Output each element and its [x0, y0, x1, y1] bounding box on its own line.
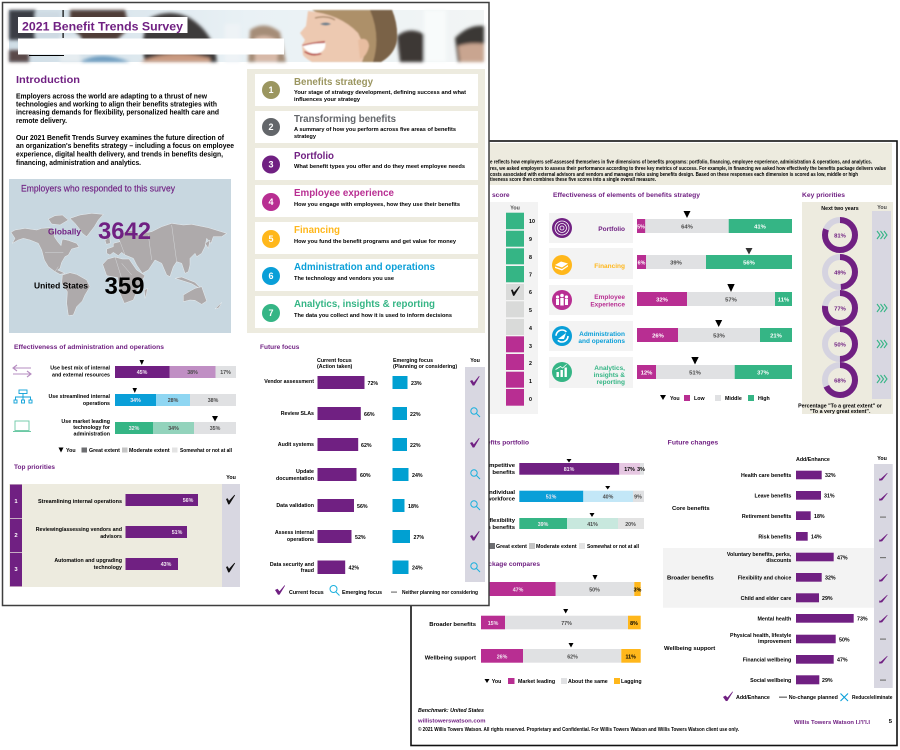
chart: benefits portfolio bars: flexibility: [489, 518, 516, 524]
page 2: benefits strategy detail: [411, 141, 897, 746]
chart: administration bars: Use market leading: [61, 419, 110, 425]
donut 68%: 68%: [834, 378, 847, 384]
row: update documentation: [276, 468, 423, 482]
row: update documentation: documentation: [276, 476, 314, 482]
panel: top priorities: 1: [14, 499, 18, 505]
item 5: [255, 222, 478, 254]
panel: key priorities donuts: Next two years: [821, 206, 859, 212]
chart: benefits portfolio bars: 9%: [634, 495, 642, 501]
item 2: strategy: [294, 134, 316, 140]
row: audit systems: 22%: [410, 443, 421, 449]
item 4: How you engage with employees, how they use their benefits: [294, 202, 460, 208]
row: audit systems: Audit systems: [278, 442, 314, 448]
heading: key priorities: Key priorities: [802, 192, 845, 199]
title: 2021 Benefit Trends Survey: [22, 20, 183, 34]
panel: key priorities donuts: Percentage "To a great extent" or: [798, 404, 882, 410]
legend: administration: [58, 448, 232, 454]
item 2: [255, 111, 478, 143]
row: analytics: reporting: [596, 379, 625, 386]
panel: score scale: 2: [529, 361, 532, 367]
panel: top priorities: advisors: [100, 534, 122, 540]
row: employee experience: Employee: [594, 294, 625, 301]
item 2: 2: [268, 122, 274, 132]
donut 81%: [825, 220, 855, 250]
row: vendor assessment: 23%: [411, 381, 422, 387]
row: administration and operations: 26%: [652, 334, 665, 340]
item 2: Transforming benefits: [294, 114, 396, 125]
donut 50%: [825, 329, 855, 359]
chart: benefits portfolio bars: 20%: [625, 522, 636, 528]
intro text: an organization's benefits strategy – including a focus on employee: [16, 143, 234, 150]
bars: wellbeing support: Social wellbeing: [750, 678, 791, 684]
row: review SLAs: 22%: [410, 412, 421, 418]
chart: package comparison: 3%: [634, 588, 642, 594]
chart: administration bars: 34%: [168, 426, 179, 432]
bars: core benefits: 14%: [811, 534, 822, 540]
row: financing: 39%: [670, 260, 683, 266]
legend: package comparison: About the same: [568, 679, 608, 685]
panel: top priorities: 56%: [183, 498, 194, 504]
percent fragment: %: [486, 290, 491, 296]
legend: portfolio: Moderate extent: [536, 544, 577, 550]
row: employee experience: 11%: [778, 298, 790, 304]
footer logo: Willis Towers Watson I.I'I'I.I: [794, 720, 871, 726]
heading: future focus: Future focus: [260, 344, 300, 351]
row: data validation: [276, 499, 419, 512]
legend: future focus: Emerging focus: [342, 590, 382, 596]
chart: benefits portfolio bars: benefits: [492, 470, 516, 476]
bars: broader benefits: Flexibility and choice: [738, 576, 791, 582]
chart: benefits portfolio bars: workforce: [486, 496, 516, 502]
intro text: technologies and working to align their benefits strategies with: [16, 102, 217, 108]
chart: benefits portfolio bars: 39%: [538, 522, 549, 528]
banner photo: [9, 10, 484, 62]
row: analytics: [549, 357, 792, 388]
row: data validation: Data validation: [276, 503, 314, 509]
row: review SLAs: [281, 407, 421, 420]
row: analytics: 51%: [689, 370, 702, 376]
chart: administration bars: [13, 360, 236, 438]
chart: administration bars: technology for: [73, 425, 110, 431]
item 5: How you fund the benefit programs and get value for money: [294, 239, 456, 245]
row: data security: Data security and: [270, 562, 314, 568]
intro band: [412, 143, 892, 185]
bars: wellbeing support: Physical health, lifestyle: [730, 633, 791, 639]
item 4: 4: [268, 197, 274, 207]
row: data validation: 56%: [357, 504, 368, 510]
chart: future changes: You: [877, 456, 887, 462]
panel: score scale: You: [510, 206, 520, 212]
bars: core benefits: Retirement benefits: [742, 514, 791, 520]
chart: administration bars: 38%: [187, 370, 198, 376]
row: audit systems: 62%: [361, 443, 372, 449]
intro text: [16, 94, 234, 167]
item 7: [255, 296, 478, 328]
chart: administration bars: and external resources: [52, 372, 110, 378]
legend: strategy effectiveness: High: [758, 396, 770, 402]
legend: future focus: Neither planning nor considering: [402, 590, 478, 596]
item 3: 3: [268, 160, 274, 170]
panel: score scale: 0: [529, 397, 532, 403]
row: data security: [270, 560, 423, 574]
heading: effectiveness of administration: Effectiveness of administration and operations: [14, 344, 164, 351]
row: assess internal operations: operations: [287, 537, 314, 543]
legend: administration: Moderate extent: [129, 448, 170, 454]
row: data security: 24%: [412, 566, 423, 572]
donut 49%: 49%: [834, 270, 847, 276]
panel: employers map: United States: [34, 281, 88, 291]
row: portfolio: 5%: [637, 224, 645, 230]
legend: portfolio: [489, 543, 639, 550]
chart: administration bars: 28%: [168, 398, 179, 404]
chart: benefits portfolio bars: in benefits: [486, 525, 516, 531]
item 3: What benefit types you offer and do they meet employee needs: [294, 164, 465, 170]
page number: 5: [889, 719, 893, 725]
intro text: Employers across the world are adapting to a thrust of new: [16, 94, 208, 100]
row: update documentation: Update: [296, 469, 314, 475]
chart: future focus: Current focus: [317, 358, 352, 364]
intro text: financing, administration and analytics.: [16, 160, 141, 167]
footer text: benchmark and copyright: [417, 708, 739, 733]
chart: package comparison: 62%: [567, 654, 578, 660]
legend: portfolio: Great extent: [496, 544, 527, 550]
chart: administration bars: 35%: [210, 426, 221, 432]
row: administration and operations: Administration: [579, 331, 625, 338]
row: employee experience: 57%: [725, 298, 738, 304]
row: analytics: 12%: [641, 370, 653, 376]
item 1: influences your strategy: [294, 97, 360, 103]
panel: top priorities: Reviewing/assessing vendors and: [36, 527, 122, 533]
bars: wellbeing support: [730, 614, 868, 684]
bars: broader benefits: [727, 552, 848, 602]
legend: package comparison: Market leading: [518, 679, 555, 685]
row: data security: 42%: [348, 566, 359, 572]
white strip in banner: [18, 38, 284, 54]
panel: employers map: 3642: [98, 218, 151, 245]
intro text: Our 2021 Benefit Trends Survey examines the future direction of: [16, 135, 225, 142]
panel: top priorities: 43%: [161, 562, 172, 568]
icon: arrows: [13, 365, 31, 377]
chart: administration bars: Use best mix of internal: [50, 366, 111, 372]
item 1: Benefits strategy: [294, 77, 373, 88]
chart: future focus: Emerging focus: [393, 358, 433, 364]
heading: introduction: Introduction: [16, 74, 80, 86]
bars: broader benefits: 47%: [837, 556, 848, 562]
panel: score scale: 3: [529, 344, 532, 350]
icon: org network: [14, 390, 32, 403]
row: update documentation: 60%: [360, 473, 371, 479]
legend: administration: You: [66, 448, 76, 454]
row: financing: Financing: [594, 263, 625, 270]
icon: laptop: [13, 421, 31, 432]
legend: package comparison: [484, 678, 642, 685]
bars: core benefits: 31%: [824, 494, 835, 500]
panel: score scale: 6: [529, 290, 532, 296]
chart: package comparison: 11%: [626, 654, 636, 660]
row: portfolio: Portfolio: [598, 226, 625, 233]
chart: future changes: Add/Enhance: [796, 457, 830, 463]
row: analytics: 37%: [757, 370, 770, 376]
row: portfolio: [549, 211, 792, 243]
bars: core benefits: Leave benefits: [754, 494, 791, 500]
item 7: The data you collect and how it is used to inform decisions: [294, 313, 452, 319]
item 1: 1: [268, 85, 274, 95]
bars: broader benefits: Voluntary benefits, perks,: [727, 552, 792, 558]
legend: future changes: Reduce/eliminate: [852, 695, 893, 701]
donut 77%: [825, 293, 855, 323]
chart: administration bars: Use streamlined internal: [48, 394, 111, 400]
item 2: A summary of how you perform across five areas of benefits: [294, 127, 456, 133]
row: portfolio: 41%: [754, 224, 767, 230]
chart: administration bars: 17%: [220, 370, 231, 376]
panel: score scale: 5: [529, 308, 532, 314]
row: analytics: Analytics,: [594, 365, 625, 372]
chart: package comparison: 26%: [497, 654, 508, 660]
donut 68%: [825, 365, 855, 395]
panel: contents list: [247, 69, 485, 333]
footer text: benchmark and copyright: © 2021 Willis Towers Watson. All rights reserved. Proprietary and Confidential. For Willis Towers Watson and Willis Towers Watson client use only.: [418, 726, 739, 733]
chart: package comparison: 15%: [488, 621, 499, 627]
panel: score scale: 8: [529, 255, 532, 261]
row: administration and operations: [549, 320, 792, 351]
panel: top priorities: technology: [94, 565, 122, 571]
bars: broader benefits: 29%: [822, 596, 833, 602]
legend: strategy effectiveness: Middle: [725, 396, 742, 402]
legend: strategy effectiveness: [660, 395, 770, 402]
row: vendor assessment: [264, 376, 422, 389]
panel: top priorities: 3: [14, 567, 18, 573]
chart: future changes: Broader benefits: [667, 576, 715, 582]
row: financing: 56%: [743, 260, 756, 266]
chart: benefits portfolio bars: individual: [488, 490, 515, 496]
heading: future changes: Future changes: [668, 440, 719, 446]
item 6: Administration and operations: [294, 262, 435, 273]
chart: future changes: Core benefits: [672, 506, 710, 512]
chart: administration bars: 38%: [208, 398, 219, 404]
item 5: 5: [268, 234, 274, 244]
chart: administration bars: 45%: [137, 370, 148, 376]
bars: broader benefits: discounts: [766, 558, 791, 564]
intro text: increasing demands for flexibility, personalized health care and: [16, 110, 219, 116]
chart: future focus: (Planning or considering): [393, 364, 457, 370]
footer text: benchmark and copyright: willistowerswatson.com: [417, 719, 485, 725]
donut 77%: 77%: [834, 306, 847, 312]
panel: top priorities: You: [226, 475, 236, 481]
chart: package comparison: Wellbeing support: [425, 656, 476, 662]
item 1: [255, 74, 478, 106]
panel: score scale: [480, 202, 538, 414]
chart: future changes: Wellbeing support: [664, 646, 715, 652]
legend: future changes: [723, 692, 893, 701]
bars: core benefits: 32%: [825, 473, 836, 479]
legend: future changes: Add/Enhance: [736, 695, 770, 701]
chart: administration bars: operations: [83, 401, 110, 407]
row: assess internal operations: Assess internal: [275, 530, 315, 536]
bars: core benefits: [741, 471, 836, 541]
decorative crop mark fragments: [62, 10, 64, 17]
donut 81%: 81%: [834, 234, 847, 240]
panel: employers map: Employers who responded to this survey: [21, 184, 175, 194]
heading: benefits portfolio: Benefits portfolio: [474, 440, 529, 446]
donut 50%: 50%: [834, 342, 847, 348]
chart: administration bars: 34%: [130, 398, 141, 404]
legend: strategy effectiveness: Low: [694, 396, 705, 402]
item 3: Portfolio: [294, 151, 334, 162]
row: review SLAs: 66%: [364, 412, 375, 418]
chart: future focus: (Action taken): [317, 364, 353, 370]
row: audit systems: [278, 438, 421, 451]
item 4: [255, 185, 478, 217]
chart: benefits portfolio bars: Competitive: [481, 463, 516, 469]
intro text: experience, digital health delivery, and trends in benefits design,: [16, 152, 223, 158]
chart: package comparison: 8%: [630, 621, 638, 627]
panel: top priorities: 2: [14, 533, 18, 539]
panel: key priorities donuts: You: [877, 205, 887, 211]
legend: strategy effectiveness: You: [670, 396, 680, 402]
chart: benefits portfolio bars: 81%: [564, 467, 575, 473]
bars: wellbeing support: improvement: [758, 639, 792, 645]
row: data validation: 18%: [408, 504, 419, 510]
bars: wellbeing support: 47%: [837, 658, 848, 664]
chart: package comparison: 47%: [513, 588, 524, 594]
legend: future focus: [275, 585, 478, 596]
bars: wellbeing support: Financial wellbeing: [743, 658, 791, 664]
chart: future focus: [264, 358, 485, 582]
panel: score scale: 9: [529, 237, 532, 243]
chart: benefits portfolio bars: 41%: [587, 522, 598, 528]
bars: core benefits: Health care benefits: [741, 473, 791, 479]
item 3: [255, 148, 478, 180]
legend: future changes: No-change planned: [789, 695, 838, 701]
panel: employers map: [9, 179, 231, 333]
row: financing: [549, 248, 792, 279]
row: assess internal operations: [275, 530, 424, 543]
intro band: tiveness score then combines these five scores into a single overall measure.: [490, 177, 656, 183]
item 6: The technology and vendors you use: [294, 276, 394, 282]
panel: employers map: 359: [104, 273, 144, 300]
chart: package comparison: 77%: [561, 621, 572, 627]
row: employee experience: 32%: [656, 298, 669, 304]
chart: future focus: You: [470, 358, 480, 364]
bars: wellbeing support: 29%: [822, 678, 833, 684]
legend: package comparison: You: [492, 679, 501, 685]
row: vendor assessment: Vendor assessment: [264, 379, 314, 385]
bars: broader benefits: 32%: [825, 576, 836, 582]
panel: score scale: 4: [529, 326, 532, 332]
row: analytics: insights &: [594, 372, 625, 379]
donut 49%: [825, 257, 855, 287]
icons: you column marks: [879, 473, 888, 681]
heading: package compares: How your benefit package compares: [425, 561, 540, 568]
panel: key priorities donuts: "To a very great extent".: [810, 409, 871, 415]
item 5: Financing: [294, 225, 340, 236]
row: portfolio: 64%: [681, 224, 694, 230]
chart: benefits portfolio bars: 3%: [637, 467, 645, 473]
heading: top priorities: Top priorities: [14, 464, 55, 471]
heading: effectiveness of elements: Effectiveness of elements of benefits strategy: [553, 192, 700, 199]
row: review SLAs: Review SLAs: [281, 411, 314, 417]
panel: employers map: Globally: [48, 226, 81, 236]
row: administration and operations: and operations: [578, 338, 625, 345]
row: assess internal operations: 52%: [355, 535, 366, 541]
icons: green chevrons: [877, 231, 887, 383]
chart: package comparison: 50%: [589, 588, 600, 594]
panel: top priorities: [9, 475, 240, 587]
panel: top priorities: Streamlining internal operations: [38, 499, 122, 505]
chart: administration bars: administration: [74, 432, 110, 438]
chart: package comparison: [425, 575, 642, 663]
world map: [11, 213, 227, 316]
row: administration and operations: 53%: [713, 334, 726, 340]
item 4: Employee experience: [294, 188, 394, 199]
row: employee experience: [549, 284, 792, 315]
bars: broader benefits: Child and elder care: [741, 596, 791, 602]
panel: key priorities donuts: [798, 202, 893, 415]
row: administration and operations: 21%: [770, 334, 783, 340]
bars: core benefits: Risk benefits: [758, 534, 791, 540]
icons: you column marks: [470, 376, 480, 572]
legend: future focus: Current focus: [289, 590, 324, 596]
row: financing: 6%: [638, 260, 646, 266]
panel: score scale: 7: [529, 272, 532, 278]
item 6: 6: [268, 271, 274, 281]
legend: portfolio: Somewhat or not at all: [587, 544, 639, 550]
page 1: overview: [2, 2, 489, 606]
legend: package comparison: Lagging: [621, 679, 642, 685]
panel: score scale: 10: [529, 219, 535, 225]
bars: wellbeing support: 50%: [839, 638, 850, 644]
legend: administration: Great extent: [89, 448, 120, 454]
legend: administration: Somewhat or not at all: [180, 448, 232, 454]
row: vendor assessment: 72%: [368, 381, 378, 387]
chart: benefits portfolio bars: 51%: [546, 495, 557, 501]
chart: benefits portfolio bars: [481, 459, 645, 531]
item 7: 7: [268, 308, 274, 318]
chart: benefits portfolio bars: 40%: [603, 495, 614, 501]
row: data security: fraud: [301, 568, 314, 574]
panel: score scale: 1: [529, 379, 532, 385]
intro text: remote delivery.: [16, 118, 67, 125]
bars: core benefits: 18%: [814, 514, 825, 520]
chart: administration bars: 32%: [129, 426, 140, 432]
bars: wellbeing support: Mental health: [757, 616, 791, 622]
row: assess internal operations: 27%: [414, 535, 424, 541]
bars: wellbeing support: 73%: [857, 616, 868, 622]
panel: top priorities: 51%: [172, 530, 183, 536]
chart: package comparison: Broader benefits: [429, 622, 477, 628]
heading: overall score: score: [492, 192, 510, 199]
footer text: benchmark and copyright: Benchmark: United States: [418, 708, 484, 714]
chart: benefits portfolio bars: 17%: [624, 467, 635, 473]
row: employee experience: Experience: [590, 302, 625, 308]
item 6: [255, 259, 478, 291]
panel: top priorities: Automation and upgrading: [54, 558, 122, 564]
item 7: Analytics, insights & reporting: [294, 299, 435, 310]
chart: future changes: [663, 456, 893, 688]
row: update documentation: 24%: [412, 473, 423, 479]
item 1: Your stage of strategy development, defining success and what: [294, 90, 466, 96]
